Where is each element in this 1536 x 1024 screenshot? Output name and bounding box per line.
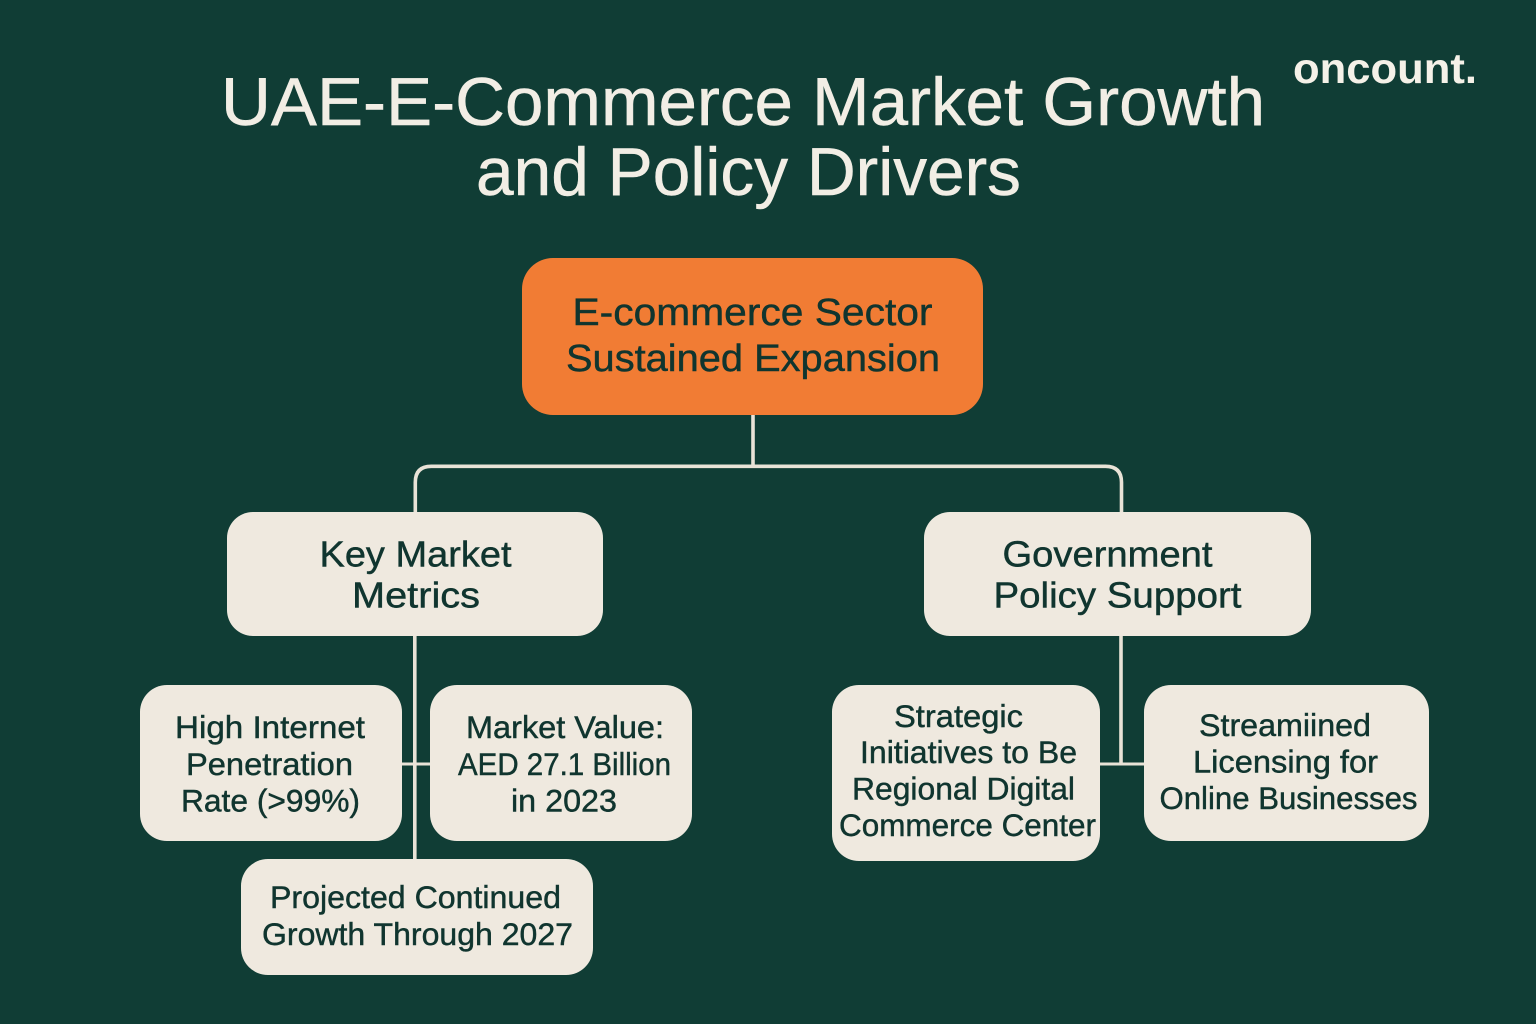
panel: government policy support: Government (1002, 534, 1212, 575)
metric: projected growth (241, 859, 593, 975)
policy: strategic initiatives (832, 685, 1100, 861)
policy: streamlined licensing (1144, 685, 1429, 841)
metric: projected growth: Projected Continued (270, 879, 561, 915)
policy: streamlined licensing: Streamiined (1199, 707, 1371, 743)
policy: strategic initiatives: Initiatives to Be (860, 734, 1077, 770)
title: and Policy Drivers (476, 135, 1021, 210)
panel: key market metrics: Metrics (352, 575, 480, 616)
policy: strategic initiatives: Commerce Center (839, 807, 1096, 843)
policy: streamlined licensing: Licensing for (1193, 744, 1378, 780)
panel: government policy support: Policy Support (994, 575, 1242, 616)
metric: internet penetration: Penetration (186, 746, 353, 782)
title (221, 65, 1265, 210)
panel: key market metrics (227, 512, 603, 636)
metric: internet penetration: High Internet (175, 709, 365, 745)
root node: e-commerce sector: Sustained Expansion (566, 338, 940, 380)
metric: market value: AED 27.1 Billion (458, 746, 671, 782)
metric: internet penetration: Rate (>99%) (181, 782, 360, 818)
metric: market value (430, 685, 692, 841)
policy: strategic initiatives: Strategic (894, 698, 1023, 734)
metric: market value: in 2023 (511, 782, 617, 818)
policy: strategic initiatives: Regional Digital (852, 770, 1075, 806)
root node: e-commerce sector: E-commerce Sector (572, 292, 933, 334)
root node: e-commerce sector (522, 258, 983, 415)
panel: key market metrics: Key Market (320, 534, 512, 575)
metric: market value: Market Value: (466, 709, 664, 745)
brand logo: oncount. (1293, 45, 1477, 93)
panel: government policy support (924, 512, 1311, 636)
connector tree (401, 414, 1145, 860)
title: UAE-E-Commerce Market Growth (221, 65, 1265, 140)
policy: streamlined licensing: Online Businesses (1160, 780, 1418, 816)
metric: internet penetration (140, 685, 402, 841)
metric: projected growth: Growth Through 2027 (262, 916, 573, 952)
